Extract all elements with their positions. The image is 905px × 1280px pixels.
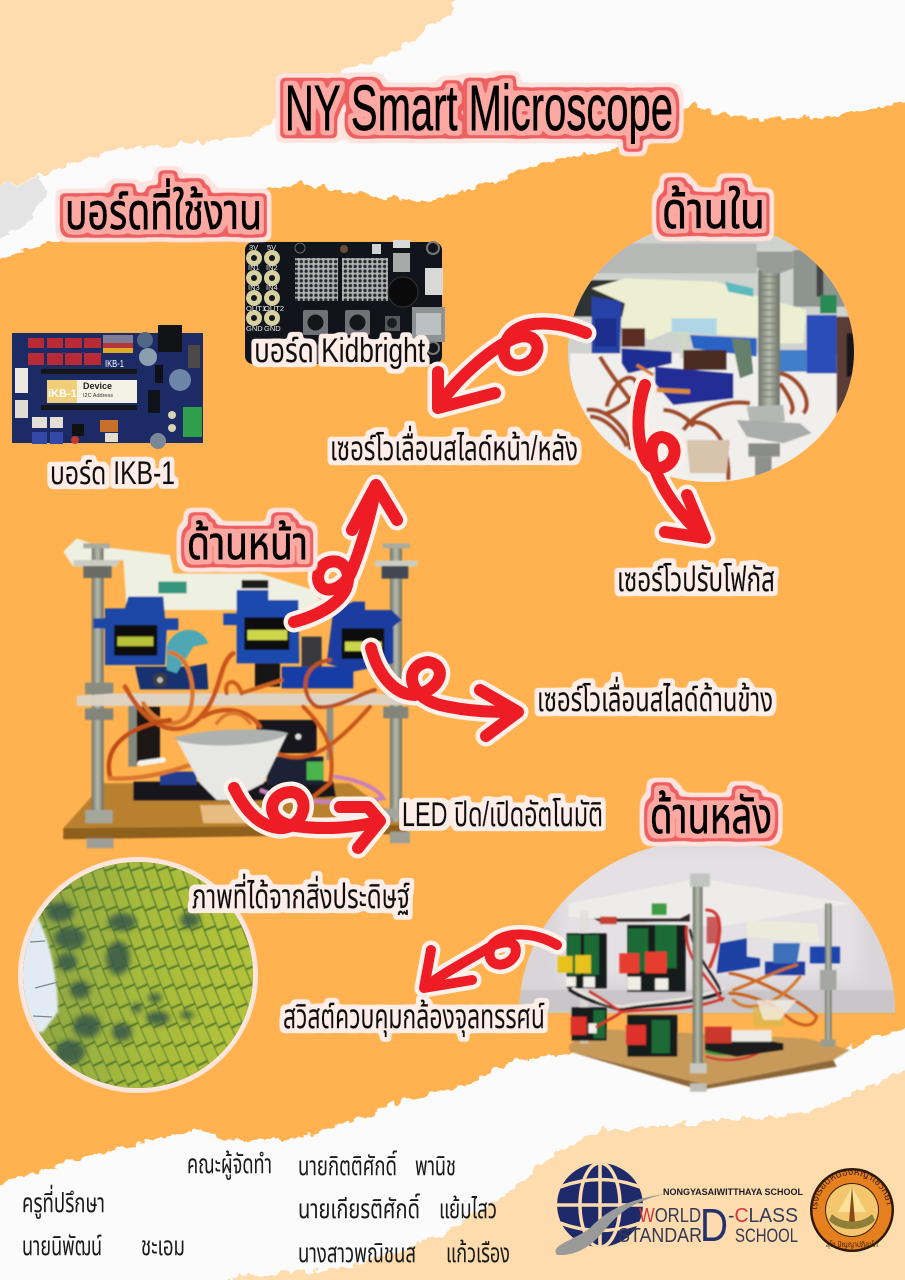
torn paper: top — [0, 0, 905, 268]
logo: school seal: โรงเรียนหนองหญ้าไซวิทยา — [810, 1170, 891, 1210]
servo right — [327, 602, 402, 672]
photo: microscope leaf image — [18, 857, 258, 1093]
credits: makers: นายกิตติศักดิ์ — [298, 1151, 397, 1181]
label: forward/back servo: เซอร์โวเลื่อนสไลด์หน้า/หลัง — [330, 425, 578, 468]
board: Kidbright: IN4 — [266, 283, 278, 292]
credits: makers: แก้วเรือง — [446, 1238, 510, 1268]
heading: front: ด้านหน้า — [187, 517, 308, 569]
heading: back: ด้านหลัง — [650, 788, 772, 844]
arrow: back switches to switch label — [424, 934, 557, 988]
pink wire — [260, 777, 383, 802]
arrow: inner view to focus servo label — [638, 385, 705, 538]
logo: world class standard school: SCHOOL — [735, 1226, 798, 1247]
board: IKB-1: Device — [83, 381, 112, 391]
credits: makers: พานิช — [415, 1151, 456, 1181]
logo: world class standard school — [556, 1163, 803, 1255]
arrow: front servo to forward/back servo label — [294, 485, 397, 622]
wires — [570, 910, 817, 1060]
rods — [92, 545, 104, 822]
torn paper: bottom — [0, 1020, 905, 1280]
servo mid — [223, 590, 299, 663]
top tape — [63, 538, 327, 610]
credits: makers: แย้มไสว — [439, 1194, 497, 1224]
reflector cone — [177, 730, 287, 800]
board: Kidbright: 5V — [267, 243, 276, 252]
board: Kidbright: GND — [264, 324, 281, 333]
credits: advisor — [22, 1184, 185, 1261]
board: Kidbright: OUT1 — [246, 304, 266, 313]
back rods — [128, 703, 137, 767]
logo: school seal — [810, 1168, 894, 1252]
logo: world class standard school: D — [700, 1199, 728, 1251]
title: NY Smart Microscope — [285, 72, 673, 144]
board: IKB-1: I2C Address — [83, 393, 113, 399]
logo: world class standard school: WORLD — [639, 1205, 701, 1227]
logo: world class standard school: NONGYASAIWITTHAYA SCHOOL — [663, 1187, 803, 1198]
label: Kidbright board: บอร์ด Kidbright — [254, 332, 425, 370]
back grey dome — [519, 840, 895, 1015]
logo: world class standard school: STANDAR — [618, 1225, 702, 1247]
board: Kidbright: IN3 — [248, 283, 260, 292]
board: Kidbright: GND — [246, 324, 263, 333]
board: IKB-1: iKB-1 — [48, 388, 77, 400]
credits: makers: นางสาวพณิชนส — [298, 1238, 416, 1268]
credits: makers: นายเกียรติศักดิ์ — [298, 1194, 420, 1224]
credits: makers — [187, 1149, 510, 1268]
board: Kidbright: IN1 — [248, 263, 260, 272]
board: IKB-1: IKB-1 — [105, 359, 124, 370]
board: Kidbright: IN2 — [266, 263, 278, 272]
credits: advisor: ครูที่ปรึกษา — [22, 1184, 105, 1219]
arrow: front servo to side servo label — [371, 648, 518, 736]
board: Kidbright: 3V — [249, 243, 258, 252]
heading: inside: ด้านใน — [662, 183, 765, 239]
base board — [63, 783, 407, 838]
label: LED: LED ปิด/เปิดอัตโนมัติ — [402, 796, 603, 834]
photo: back view of microscope — [519, 840, 895, 1092]
lower dark boards — [133, 782, 336, 801]
credits: makers: คณะผู้จัดทำ — [187, 1149, 272, 1180]
heading: boards used: บอร์ดที่ใช้งาน — [65, 178, 262, 240]
board: Kidbright — [245, 240, 445, 364]
photo: inner view — [568, 233, 854, 482]
rods — [693, 883, 703, 1067]
logo: school seal: สุโข ปัญญาปฏิลาโภ — [826, 1240, 878, 1249]
modules — [567, 933, 607, 988]
photo: front view of microscope — [63, 538, 418, 848]
arrow: reflector to LED label — [234, 788, 380, 848]
label: IKB-1 board: บอร์ด IKB-1 — [50, 455, 175, 491]
label: switch: สวิสต์ควบคุมกล้องจุลทรรศน์ — [283, 998, 545, 1037]
logo: world class standard school: -CLASS — [728, 1205, 798, 1227]
label: image result: ภาพที่ได้จากสิ่งประดิษฐ์ — [192, 873, 410, 916]
wires — [109, 653, 375, 797]
acrylic top — [568, 878, 850, 927]
board: IKB-1 — [12, 325, 203, 449]
servo left — [93, 597, 178, 665]
board: Kidbright: OUT2 — [264, 304, 284, 313]
label: side servo: เซอร์โวเลื่อนสไลด์ด้านข้าง — [537, 676, 773, 719]
middle acrylic plate — [77, 693, 407, 706]
arrow: inner view to forward/back servo label — [438, 323, 586, 408]
credits: advisor: นายนิพัฒน์ — [22, 1231, 102, 1261]
credits: advisor: ชะเอม — [141, 1231, 185, 1261]
label: focus servo: เซอร์โวปรับโฟกัส — [617, 561, 775, 599]
